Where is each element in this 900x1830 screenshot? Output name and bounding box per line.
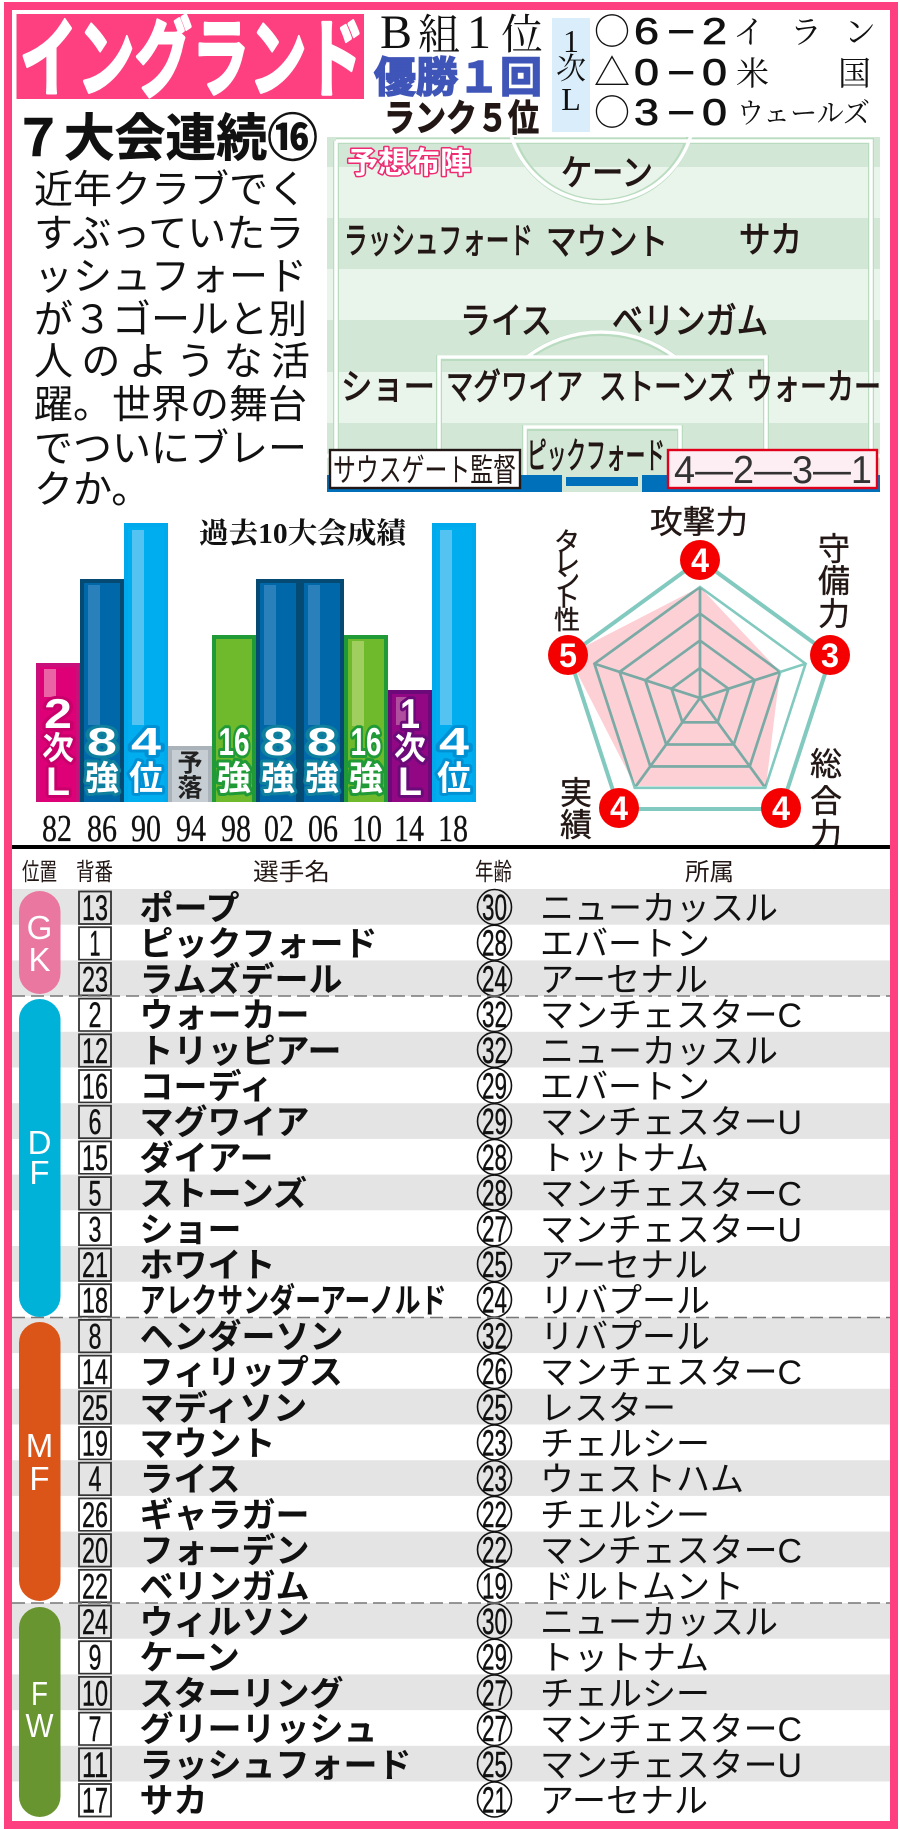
position badge: MF — [19, 1322, 60, 1601]
body text: 人のような活 — [34, 341, 310, 384]
label: タレント性: タレント性 — [554, 527, 580, 635]
group standing: B組1位 — [380, 6, 543, 59]
bar 2010: 16 — [350, 721, 382, 764]
node: 攻撃力 4: 4 — [691, 542, 709, 580]
row: コーディ: 16 — [82, 1068, 108, 1106]
player positions: マグワイア — [446, 366, 583, 407]
bar 2018 — [432, 523, 476, 802]
pitch stripes — [327, 137, 880, 492]
year labels: 14 — [394, 808, 424, 850]
row: フィリップス: 14 — [82, 1353, 108, 1392]
row: ラッシュフォード: ラッシュフォード — [140, 1747, 412, 1785]
row: ラッシュフォード: マンチェスターU — [540, 1747, 802, 1785]
row: マディソン: レスター — [540, 1390, 676, 1428]
bar 2014 — [388, 690, 432, 804]
node: 実績 4 — [599, 788, 639, 828]
manager box: サウスゲート監督 — [333, 452, 516, 488]
row: サカ: アーセナル — [540, 1782, 708, 1820]
row: ウィルソン: ニューカッスル — [540, 1604, 778, 1642]
bar 1998: 16 — [218, 721, 250, 764]
row: アレクサンダーアーノルド: リバプール — [540, 1283, 710, 1321]
row: ホワイト: ホワイト — [140, 1247, 276, 1285]
player positions: マウント — [546, 221, 668, 262]
row: マウント: 23 — [482, 1422, 507, 1464]
row: ケーン: 9 — [88, 1639, 102, 1678]
table header: 背番 — [76, 859, 113, 886]
position badge: FW: F — [31, 1675, 48, 1712]
bar 1994 — [168, 746, 212, 802]
row: ウィルソン: 30 — [482, 1601, 507, 1642]
row: ホワイト — [12, 1244, 890, 1285]
row: トリッピアー: トリッピアー — [140, 1033, 341, 1071]
result: Iran: ○ — [594, 3, 630, 55]
row: マグワイア: マンチェスターU — [540, 1104, 802, 1142]
championships: 優勝1回: 優勝１回 — [374, 54, 542, 101]
chart title: 過去10大会成績: 過去10大会成績 — [199, 517, 410, 550]
body text: ッシュフォード — [34, 256, 307, 299]
group standing: B組1位: 組 — [418, 13, 460, 59]
row: アレクサンダーアーノルド: 24 — [482, 1280, 507, 1321]
node: 守備力 3: 3 — [821, 637, 839, 675]
result: Wales: ○ — [594, 84, 630, 136]
row: スターリング: 10 — [82, 1674, 108, 1713]
radar grid — [594, 587, 806, 788]
bar 2002: 強 — [261, 760, 295, 798]
row: アレクサンダーアーノルド — [79, 1280, 710, 1321]
row: ライス: ウェストハム — [540, 1461, 744, 1499]
player positions: ショー — [341, 366, 435, 407]
row: サカ: サカ — [140, 1782, 208, 1820]
row: ポープ: 30 — [482, 887, 507, 928]
row: ピックフォード — [79, 923, 710, 964]
result: USA: 0 — [702, 52, 727, 93]
row: グリーリッシュ: グリーリッシュ — [140, 1711, 378, 1749]
radar chart — [548, 504, 850, 853]
result: Iran — [594, 3, 876, 55]
row: ギャラガー: チェルシー — [540, 1497, 710, 1535]
year labels: 02 — [264, 808, 294, 850]
bar 2010: 強 — [349, 760, 383, 798]
row: マディソン: 25 — [82, 1389, 108, 1428]
body text: 近年クラブでく — [34, 169, 307, 212]
bar 1986: 強 — [85, 760, 119, 798]
result: Iran: 6 — [634, 11, 659, 52]
row: マウント: 19 — [82, 1424, 108, 1464]
title: イングランド — [16, 12, 364, 108]
row: アレクサンダーアーノルド: アレクサンダーアーノルド — [140, 1282, 446, 1321]
row: ピックフォード: ピックフォード — [140, 926, 378, 964]
panel: predicted formation pitch — [327, 137, 880, 492]
row: フィリップス: フィリップス — [140, 1354, 343, 1392]
row: ホワイト: 25 — [482, 1244, 507, 1285]
row: フォーデン: マンチェスターC — [540, 1533, 802, 1571]
row: ギャラガー: 22 — [482, 1494, 507, 1535]
row: ショー: 3 — [88, 1210, 102, 1249]
position badge: MF: M — [26, 1427, 53, 1464]
row: ストーンズ: 28 — [482, 1173, 507, 1214]
row: ラムズデール: ラムズデール — [140, 960, 342, 999]
body text: 躍。世界の舞台 — [34, 384, 307, 427]
row: ケーン: トットナム — [540, 1640, 709, 1678]
FIFA rank: ランク5位: ランク５位 — [384, 98, 539, 139]
result: USA — [594, 44, 871, 96]
group stage tag: 1次L: L — [561, 81, 581, 117]
row: トリッピアー — [12, 1030, 890, 1071]
bar 2006 — [300, 579, 344, 802]
row: サカ — [79, 1780, 708, 1820]
row: ダイアー: 28 — [482, 1137, 507, 1178]
row: フォーデン: 20 — [82, 1532, 108, 1571]
row: コーディ: エバートン — [540, 1068, 710, 1106]
row: マウント: チェルシー — [540, 1426, 710, 1464]
bar chart: past 10 tournaments — [36, 523, 476, 804]
body text: が３ゴールと別 — [34, 299, 307, 342]
result: Wales: ウェールズ — [737, 98, 870, 130]
table header: 年齢 — [475, 859, 512, 886]
row: ウォーカー: 32 — [482, 994, 507, 1035]
row: ホワイト: 21 — [82, 1246, 108, 1285]
bar 1990: 4 — [131, 721, 161, 764]
result: USA: 米国 — [736, 56, 871, 93]
bar 1982: 2 — [44, 690, 72, 737]
node: 総合力 4: 4 — [772, 790, 790, 828]
row: マグワイア: マグワイア — [140, 1104, 310, 1142]
position badge: GK — [19, 891, 60, 994]
row: ポープ: ニューカッスル — [540, 890, 778, 928]
label: 予想布陣: 予想布陣 — [347, 147, 471, 180]
row: ポープ: 13 — [82, 889, 108, 928]
row: フォーデン: 22 — [482, 1530, 507, 1571]
player positions: ピックフォード — [527, 435, 665, 476]
row: ストーンズ: 5 — [88, 1175, 102, 1214]
row: ピックフォード: エバートン — [540, 926, 710, 964]
player table — [12, 887, 890, 1820]
result: Iran: イラン — [733, 14, 876, 50]
row: サカ: 17 — [82, 1782, 108, 1820]
row: マディソン: 25 — [482, 1387, 507, 1428]
row: ライス: ライス — [140, 1461, 240, 1499]
row: フォーデン — [12, 1530, 890, 1571]
node: 攻撃力 4 — [680, 540, 720, 580]
row: トリッピアー: 12 — [82, 1032, 108, 1071]
result: Wales — [594, 84, 870, 136]
row: ライス: 23 — [482, 1458, 507, 1499]
row: ウォーカー: 2 — [88, 996, 102, 1035]
year labels: 18 — [438, 808, 468, 850]
group stage tag: 1次L — [552, 18, 590, 132]
row: ダイアー: ダイアー — [140, 1139, 273, 1178]
row: ケーン: 29 — [482, 1637, 507, 1678]
position badge: DF: F — [29, 1154, 50, 1191]
row: ウォーカー: マンチェスターC — [540, 997, 802, 1035]
bar 2010 — [344, 635, 388, 802]
label: 攻撃力: 攻撃力 — [650, 504, 748, 540]
position badge: GK: G — [27, 909, 52, 946]
row: ダイアー: 15 — [82, 1139, 108, 1178]
row: ヘンダーソン: 8 — [88, 1317, 102, 1356]
row: ベリンガム: 22 — [82, 1567, 108, 1606]
row: フィリップス: マンチェスターC — [540, 1354, 802, 1392]
row: ケーン — [79, 1637, 709, 1678]
row: ベリンガム — [79, 1565, 744, 1606]
year labels: 86 — [87, 808, 117, 850]
formation box: 4—2—3—1 — [674, 449, 872, 492]
row: ラムズデール — [12, 958, 890, 999]
body text — [34, 169, 310, 512]
node: 総合力 4 — [761, 788, 801, 828]
row: グリーリッシュ: 27 — [482, 1708, 507, 1749]
bar 1982 — [36, 663, 80, 804]
row: ショー: ショー — [140, 1211, 242, 1249]
row: ダイアー — [79, 1137, 709, 1178]
row: フィリップス — [79, 1351, 802, 1392]
row: ショー: 27 — [482, 1208, 507, 1249]
bar 1994: 予 — [177, 750, 203, 778]
row: ストーンズ: ストーンズ — [140, 1175, 307, 1214]
bar 1990 — [124, 523, 168, 802]
node: 実績 4: 4 — [610, 790, 628, 828]
result: Wales: − — [667, 92, 695, 133]
bar 2014: 次 — [394, 730, 426, 766]
row: フィリップス: 26 — [482, 1351, 507, 1392]
result: Wales: 3 — [634, 92, 659, 133]
row: スターリング — [12, 1672, 890, 1713]
row: ベリンガム: ドルトムント — [540, 1568, 744, 1606]
row: ショー: マンチェスターU — [540, 1211, 802, 1249]
row: マウント — [79, 1422, 710, 1464]
result: Iran: 2 — [702, 11, 727, 52]
bar 2002: 8 — [263, 721, 293, 764]
position badge: FW — [19, 1607, 60, 1817]
player positions: ライス — [460, 300, 552, 341]
player positions: ケーン — [561, 152, 653, 193]
row: マグワイア: 29 — [482, 1101, 507, 1142]
group standing: B組1位: 1 — [467, 6, 491, 59]
node: タレント性 5 — [548, 635, 588, 675]
position badge: MF: F — [29, 1460, 50, 1497]
row: コーディ: 29 — [482, 1066, 507, 1106]
player positions: ベリンガム — [612, 300, 768, 341]
result: USA: − — [667, 52, 695, 93]
row: ショー — [79, 1208, 802, 1249]
goal line blue bars — [327, 475, 880, 492]
row: アレクサンダーアーノルド: 18 — [82, 1282, 108, 1321]
bar 2006: 強 — [305, 760, 339, 798]
data area — [568, 587, 780, 786]
row: グリーリッシュ — [79, 1708, 802, 1749]
year labels: 10 — [352, 808, 382, 850]
bar 2006: 8 — [307, 721, 337, 764]
row: マグワイア — [12, 1101, 890, 1142]
bar 1998 — [212, 635, 256, 802]
row: ウィルソン: ウィルソン — [140, 1604, 310, 1642]
row: マディソン — [12, 1387, 890, 1428]
bar 1982: L — [46, 760, 70, 804]
row: ギャラガー — [79, 1494, 710, 1535]
row: コーディ: コーディ — [140, 1068, 273, 1106]
year labels: 98 — [221, 808, 251, 850]
divider rule — [12, 845, 890, 849]
label: 守備力: 守備力 — [818, 531, 850, 632]
result: USA: 0 — [634, 52, 659, 93]
row: スターリング: 27 — [482, 1672, 507, 1713]
row: ベリンガム: 19 — [482, 1565, 507, 1606]
position badge: DF: D — [28, 1124, 51, 1161]
bar 1994: 落 — [177, 774, 203, 802]
player positions: サカ — [739, 219, 802, 260]
table header — [22, 859, 734, 886]
position badge: FW: W — [26, 1707, 54, 1744]
row: ヘンダーソン: 32 — [482, 1315, 507, 1356]
player positions — [341, 152, 881, 476]
row: ポープ — [12, 887, 890, 928]
group standing: B組1位: 位 — [501, 13, 543, 59]
row: ラッシュフォード: 25 — [482, 1744, 507, 1785]
bar 1986: 8 — [87, 721, 117, 764]
bar 2018: 4 — [439, 721, 469, 764]
row: サカ: 21 — [482, 1780, 507, 1820]
pitch lines — [327, 137, 880, 475]
row: ライス — [12, 1458, 890, 1499]
result: Wales: 0 — [702, 92, 727, 133]
row: ヘンダーソン: リバプール — [540, 1318, 710, 1356]
row: トリッピアー: ニューカッスル — [540, 1033, 778, 1071]
row: ヘンダーソン: ヘンダーソン — [140, 1317, 344, 1356]
bar 2014: L — [398, 760, 422, 804]
row: ピックフォード: 1 — [90, 925, 100, 964]
row: マグワイア: 6 — [88, 1103, 102, 1142]
row: トリッピアー: 32 — [482, 1030, 507, 1071]
table header: 位置 — [22, 859, 57, 886]
row: ギャラガー: ギャラガー — [140, 1497, 310, 1535]
label: 総合力: 総合力 — [810, 746, 842, 853]
row: ピックフォード: 28 — [482, 923, 507, 964]
result: Iran: − — [667, 11, 695, 52]
radar outline — [569, 560, 831, 809]
bar 1982: 次 — [42, 730, 74, 766]
row: ラッシュフォード: 11 — [82, 1746, 108, 1785]
row: ホワイト: アーセナル — [540, 1247, 708, 1285]
row: ストーンズ — [12, 1173, 890, 1214]
year labels: 90 — [131, 808, 161, 850]
node: タレント性 5: 5 — [559, 637, 577, 675]
row: コーディ — [79, 1066, 710, 1106]
year labels — [42, 808, 468, 850]
title: イングランド: イングランド — [20, 12, 364, 108]
year labels: 82 — [42, 808, 72, 850]
row: ラムズデール: 24 — [482, 958, 507, 999]
bar 2002 — [256, 579, 300, 802]
row: スターリング: スターリング — [140, 1675, 344, 1713]
row: ラムズデール: アーセナル — [540, 961, 708, 999]
row: フォーデン: フォーデン — [140, 1532, 310, 1571]
table header: 選手名 — [253, 859, 330, 886]
player positions: ストーンズ — [599, 366, 735, 407]
row: ダイアー: トットナム — [540, 1140, 709, 1178]
table header: 所属 — [685, 859, 734, 886]
row: ウィルソン — [12, 1601, 890, 1642]
row: ギャラガー: 26 — [82, 1496, 108, 1535]
body text: クか。 — [34, 469, 150, 512]
body text: でついにブレー — [34, 428, 307, 471]
row: グリーリッシュ: マンチェスターC — [540, 1711, 802, 1749]
year labels: 06 — [308, 808, 338, 850]
group stage tag: 1次L: 次 — [556, 53, 586, 86]
bar 2018: 位 — [437, 760, 471, 798]
headline: 7大会連続16: ７大会連続⑯ — [13, 110, 318, 167]
row: ライス: 4 — [88, 1460, 102, 1499]
result: USA: △ — [594, 44, 630, 96]
row: ウォーカー — [79, 994, 802, 1035]
label: 実績: 実績 — [560, 775, 592, 843]
position badge: GK: K — [28, 941, 51, 978]
row: ラッシュフォード — [12, 1744, 890, 1785]
row: ストーンズ: マンチェスターC — [540, 1176, 802, 1214]
manager box — [330, 450, 520, 488]
row: グリーリッシュ: 7 — [88, 1710, 102, 1749]
bar 2014: 1 — [400, 690, 420, 737]
row: ウォーカー: ウォーカー — [140, 997, 310, 1035]
bar 1998: 強 — [217, 760, 251, 798]
group stage tag: 1次L: 1 — [563, 23, 579, 59]
row: ウィルソン: 24 — [82, 1603, 108, 1642]
row: ポープ: ポープ — [140, 890, 239, 928]
position badge: DF — [19, 999, 60, 1317]
row: ケーン: ケーン — [140, 1640, 240, 1678]
row: マウント: マウント — [140, 1426, 276, 1464]
bar 1986 — [80, 579, 124, 802]
row: スターリング: チェルシー — [540, 1675, 710, 1713]
node: 守備力 3 — [810, 635, 850, 675]
year labels: 94 — [176, 808, 206, 850]
group standing: B組1位: B — [380, 6, 412, 59]
row: ヘンダーソン — [12, 1315, 890, 1356]
row: ラムズデール: 23 — [82, 960, 108, 999]
bar 1990: 位 — [129, 760, 163, 798]
row: マディソン: マディソン — [140, 1389, 307, 1428]
player positions: ラッシュフォード — [344, 220, 533, 261]
row: ベリンガム: ベリンガム — [140, 1568, 310, 1606]
body text: すぶっていたラ — [34, 213, 304, 256]
group stage results — [594, 3, 876, 136]
